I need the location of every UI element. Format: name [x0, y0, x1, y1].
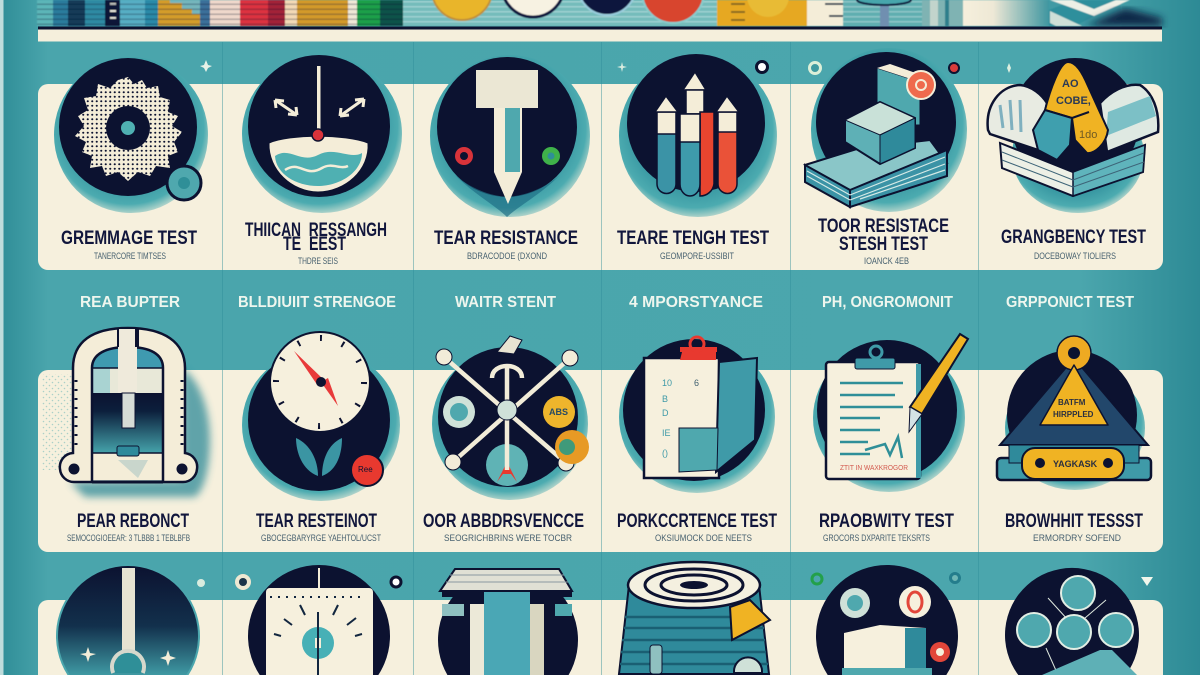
caption: THDRE SEIS: [298, 256, 338, 267]
shelf bar: [38, 26, 1162, 42]
icon: clipboard with folded paper: IE: [662, 428, 671, 438]
icon: crossed arms with badges: ABS: [549, 407, 568, 417]
icon: clipboard with folded paper: D: [662, 408, 669, 418]
cream panel: row 3: [38, 600, 1163, 675]
row 2 section headings: 4 MPORSTYANCE: [629, 294, 763, 311]
icon: clock gauge with leaves: Ree: [358, 465, 373, 474]
icon: box and badges: [816, 565, 958, 675]
cell: gremmage test: [54, 57, 208, 262]
title: PORKCCRTENCE TEST: [617, 511, 777, 532]
icon: ruler with ring: [56, 564, 200, 675]
title: PEAR REBONCT: [77, 511, 189, 532]
icon: clipboard with folded paper: 6: [694, 378, 699, 388]
icon: folded paper with yellow tag: AO: [1062, 78, 1079, 90]
row 2 section headings: REA BUPTER: [80, 294, 180, 311]
top illustration strip: [37, 0, 1162, 27]
title line two: STESH TEST: [839, 234, 928, 255]
cell: grangbency test: [988, 58, 1158, 262]
cell: rpaobwity test: [813, 334, 968, 544]
caption: DOCEBOWAY TIOLIERS: [1034, 251, 1116, 262]
title: OOR ABBDRSVENCCE: [423, 511, 584, 532]
icon: clock gauge with leaves: [242, 332, 400, 501]
icon: clipboard with folded paper: (): [662, 448, 668, 458]
icon: clipboard and pen: ZTIT IN WAXKROGOR: [840, 465, 908, 472]
cream panel: row 2: [38, 370, 1163, 552]
cell: oor abbdrsvencce: [423, 336, 589, 544]
title: GRANGBENCY TEST: [1001, 227, 1146, 248]
icon: folded paper with yellow tag: [988, 58, 1158, 213]
caption: GEOMPORE-USSIBIT: [660, 251, 734, 262]
caption: SEMOCOGIOEEAR: 3 TLBBB 1 TEBLBFB: [67, 533, 190, 544]
icon: warning triangle press: HIRPPLED: [1053, 410, 1094, 419]
title: TOOR RESISTACE: [818, 216, 949, 237]
icon: stacked paper blocks: [805, 48, 967, 212]
title: BROWHHIT TESSST: [1005, 511, 1143, 532]
title: THIICAN RESSANGH: [245, 220, 387, 241]
title: GREMMAGE TEST: [61, 228, 197, 249]
icon: tensile frame: [438, 569, 578, 675]
cell: pear rebonct: [42, 328, 210, 544]
icon: folded paper with yellow tag: COBE,: [1056, 95, 1091, 107]
icon: clipboard and pen: [813, 334, 968, 492]
row 2 section headings: BLLDIUIIT STRENGOE: [238, 294, 396, 311]
cell: browhhit tessst: [997, 336, 1151, 544]
icon: clipboard with folded paper: 10: [662, 378, 672, 388]
icon: test tubes: [619, 54, 777, 217]
caption: GBOCEGBARYRGE YAEHTOL/UCST: [261, 533, 381, 544]
icon: gauge panel: [248, 565, 390, 675]
icon: warning triangle press: YAGKASK: [1053, 459, 1098, 469]
row 2 section headings: WAITR STENT: [455, 294, 556, 311]
row 2 section headings: GRPPONICT TEST: [1006, 294, 1134, 311]
title: TEAR RESTEINOT: [256, 511, 377, 532]
icon: warning triangle press: [997, 336, 1151, 490]
cell: tensile: [617, 54, 777, 262]
caption: ERMORDRY SOFEND: [1033, 533, 1121, 544]
icon: dial with water bowl: [242, 55, 402, 213]
icon: paper roll with yellow tag: [619, 562, 770, 674]
icon: crossed arms with badges: [432, 336, 589, 500]
title: RPAOBWITY TEST: [819, 511, 954, 532]
title line two: TE EEST: [283, 234, 346, 255]
icon: warning triangle press: BATFM: [1058, 398, 1086, 407]
caption: IOANCK 4EB: [864, 256, 909, 267]
title: TEARE TENGH TEST: [617, 228, 769, 249]
cell: thickness: [242, 55, 402, 267]
cell: tear resteinot: [242, 332, 400, 544]
caption: OKSIUMOCK DOE NEETS: [655, 533, 752, 544]
caption: SEOGRICHBRINS WERE TOCBR: [444, 533, 572, 544]
cell: tour resistance: [805, 48, 967, 267]
row 2 section headings: PH, ONGROMONIT: [822, 294, 953, 311]
icon: clipboard with folded paper: B: [662, 394, 668, 404]
icon: block on spike: [430, 55, 590, 217]
icon: clipboard with folded paper: [619, 337, 775, 493]
cell: porkccrtence test: [617, 337, 777, 544]
icon: folded paper with yellow tag: 1do: [1079, 129, 1097, 141]
caption: BDRACODOE (DXOND: [467, 251, 547, 262]
title: TEAR RESISTANCE: [434, 228, 578, 249]
icon: connected circles: [1005, 568, 1139, 675]
caption: TANERCORE TIMTSES: [94, 251, 166, 262]
icon: perforated gear disc: [54, 57, 208, 213]
cell: tear resistance: [430, 55, 590, 262]
caption: GROCORS DXPARITE TEKSRTS: [823, 533, 930, 544]
small floating dots and sparkles: [197, 60, 1153, 590]
cream panel: row 1: [38, 84, 1163, 270]
row 2 section headings: [80, 294, 1134, 311]
icon: press frame: [42, 328, 210, 497]
